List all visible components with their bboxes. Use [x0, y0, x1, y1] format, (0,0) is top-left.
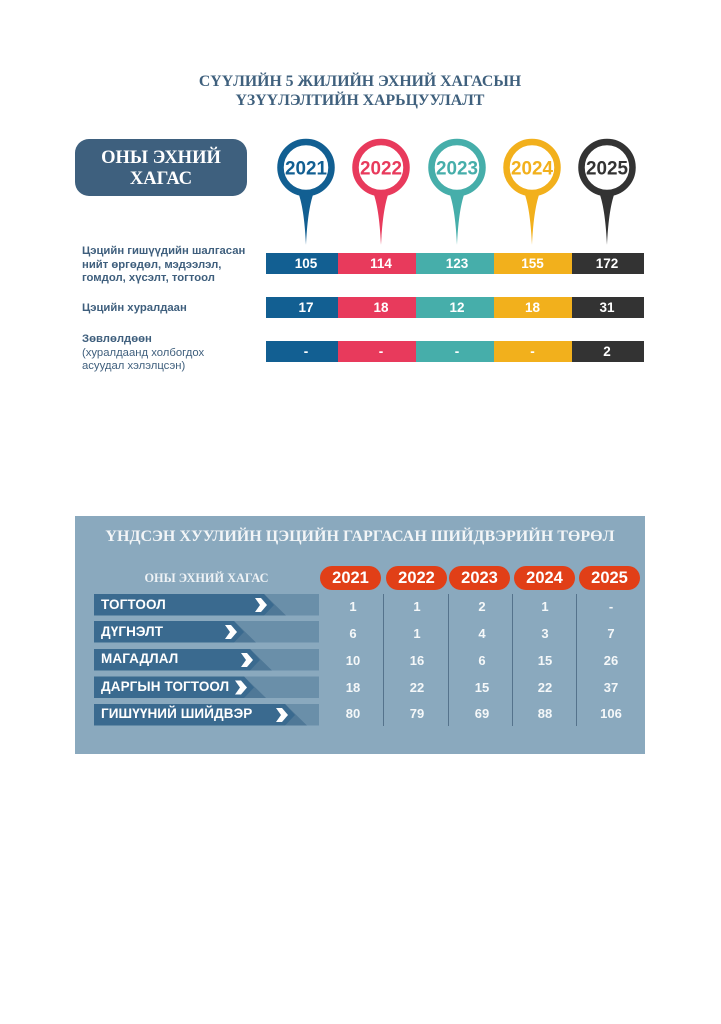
ribbon: Даргын тогтоол	[94, 676, 319, 698]
ribbon label: Дүгнэлт: ДҮГНЭЛТ	[101, 624, 163, 639]
pin: 2021	[280, 142, 332, 245]
ribbon: Тогтоол	[94, 594, 319, 616]
values: 2022: 1	[413, 599, 421, 614]
text: 15	[475, 680, 489, 695]
row label: applications: Цэцийн гишүүдийн шалгасан	[82, 245, 245, 257]
pin: 2021: 2021	[285, 158, 327, 180]
row bar: consultations: 2	[603, 344, 611, 359]
title	[199, 72, 521, 109]
panel: decision types	[75, 516, 645, 754]
row label: applications: гомдол, хүсэлт, тогтоол	[82, 272, 215, 284]
row label: applications	[82, 245, 245, 284]
row bar: applications: 155	[521, 256, 544, 271]
ribbon label: Магадлал: МАГАДЛАЛ	[101, 651, 178, 666]
values: 2025: -	[609, 599, 613, 614]
pin: 2023: 2023	[436, 158, 478, 180]
ribbon label: Тогтоол: ТОГТООЛ	[101, 597, 166, 612]
title: ҮЗҮҮЛЭЛТИЙН ХАРЬЦУУЛАЛТ	[236, 92, 484, 109]
row label: consultations: асуудал хэлэлцсэн)	[82, 360, 185, 372]
title: СҮҮЛИЙН 5 ЖИЛИЙН ЭХНИЙ ХАГАСЫН	[199, 73, 521, 90]
row bar: applications: 123	[446, 256, 468, 271]
pin: 2022: 2022	[360, 158, 402, 180]
values: 2021: 1	[349, 599, 357, 614]
pin: 2024: 2024	[511, 158, 553, 180]
year pills: 2021	[332, 569, 369, 587]
row label: applications: нийт өргөдөл, мэдээлэл,	[82, 258, 221, 270]
values: 2025	[600, 599, 622, 721]
values: 2021	[346, 599, 360, 721]
text: 37	[604, 680, 618, 695]
text: 10	[346, 653, 360, 668]
row bar: sessions: 31	[599, 300, 615, 315]
text: 7	[607, 626, 615, 641]
row bar: sessions: 12	[449, 300, 465, 315]
ribbon: Магадлал	[94, 649, 319, 670]
row bar: applications: 114	[370, 256, 392, 271]
year pills: 2025	[591, 569, 628, 587]
text: 4	[478, 626, 486, 641]
row bar: consultations: -	[530, 344, 535, 359]
row bar: sessions	[266, 297, 644, 318]
pin: 2024	[506, 142, 558, 245]
row bar: applications: 105	[295, 256, 317, 271]
text: 106	[600, 706, 622, 721]
pin: 2025	[582, 142, 632, 245]
text: 80	[346, 706, 360, 721]
pin: 2025: 2025	[586, 158, 628, 180]
text: 69	[475, 706, 489, 721]
row bar: consultations: -	[455, 344, 459, 359]
row bar: applications	[266, 253, 644, 274]
pin: 2022	[356, 142, 406, 245]
row bar: consultations: -	[304, 344, 308, 359]
ribbon label: Гишүүний шийдвэр: ГИШҮҮНИЙ ШИЙДВЭР	[101, 706, 252, 721]
text: 6	[478, 653, 486, 668]
values: 2023: 2	[478, 599, 486, 614]
row bar: sessions: 17	[298, 300, 314, 315]
row bar: consultations	[266, 341, 644, 362]
heading badge: first half of the year: ОНЫ ЭХНИЙ	[101, 148, 221, 168]
text: 22	[410, 680, 424, 695]
panel heading: ҮНДСЭН ХУУЛИЙН ЦЭЦИЙН ГАРГАСАН ШИЙДВЭРИЙН ТӨРӨЛ	[105, 528, 615, 545]
text: 1	[413, 626, 421, 641]
text: 26	[604, 653, 618, 668]
values: 2024: 1	[541, 599, 549, 614]
year pills	[320, 566, 640, 590]
row bar: sessions: 18	[525, 300, 540, 315]
year pills: 2023	[461, 569, 498, 587]
heading badge: first half of the year: ХАГАС	[130, 168, 192, 188]
table caption: ОНЫ ЭХНИЙ ХАГАС	[144, 571, 269, 585]
values: 2023	[475, 599, 489, 721]
text: 16	[410, 653, 424, 668]
heading badge: first half of the year	[75, 139, 247, 196]
row label: consultations: Зөвлөлдөөн	[82, 333, 152, 345]
row label: consultations	[82, 333, 204, 372]
text: 15	[538, 653, 552, 668]
ribbon: Дүгнэлт	[94, 621, 319, 642]
text: 88	[538, 706, 552, 721]
text: 79	[410, 706, 424, 721]
row bar: consultations: -	[379, 344, 383, 359]
ribbon label: Даргын тогтоол: ДАРГЫН ТОГТООЛ	[101, 679, 229, 694]
pin: 2023	[432, 142, 482, 245]
ribbon: Гишүүний шийдвэр	[94, 704, 319, 726]
text: 3	[541, 626, 549, 641]
row label: sessions: Цэцийн хуралдаан	[82, 302, 187, 314]
text: 18	[346, 680, 360, 695]
year pills: 2022	[398, 569, 435, 587]
text: 22	[538, 680, 552, 695]
year pills: 2024	[526, 569, 563, 587]
text: 6	[349, 626, 357, 641]
values: 2024	[538, 599, 552, 721]
values: 2022	[410, 599, 424, 721]
row label: consultations: (хуралдаанд холбогдох	[82, 346, 204, 358]
row bar: sessions: 18	[373, 300, 389, 315]
row bar: applications: 172	[596, 256, 618, 271]
